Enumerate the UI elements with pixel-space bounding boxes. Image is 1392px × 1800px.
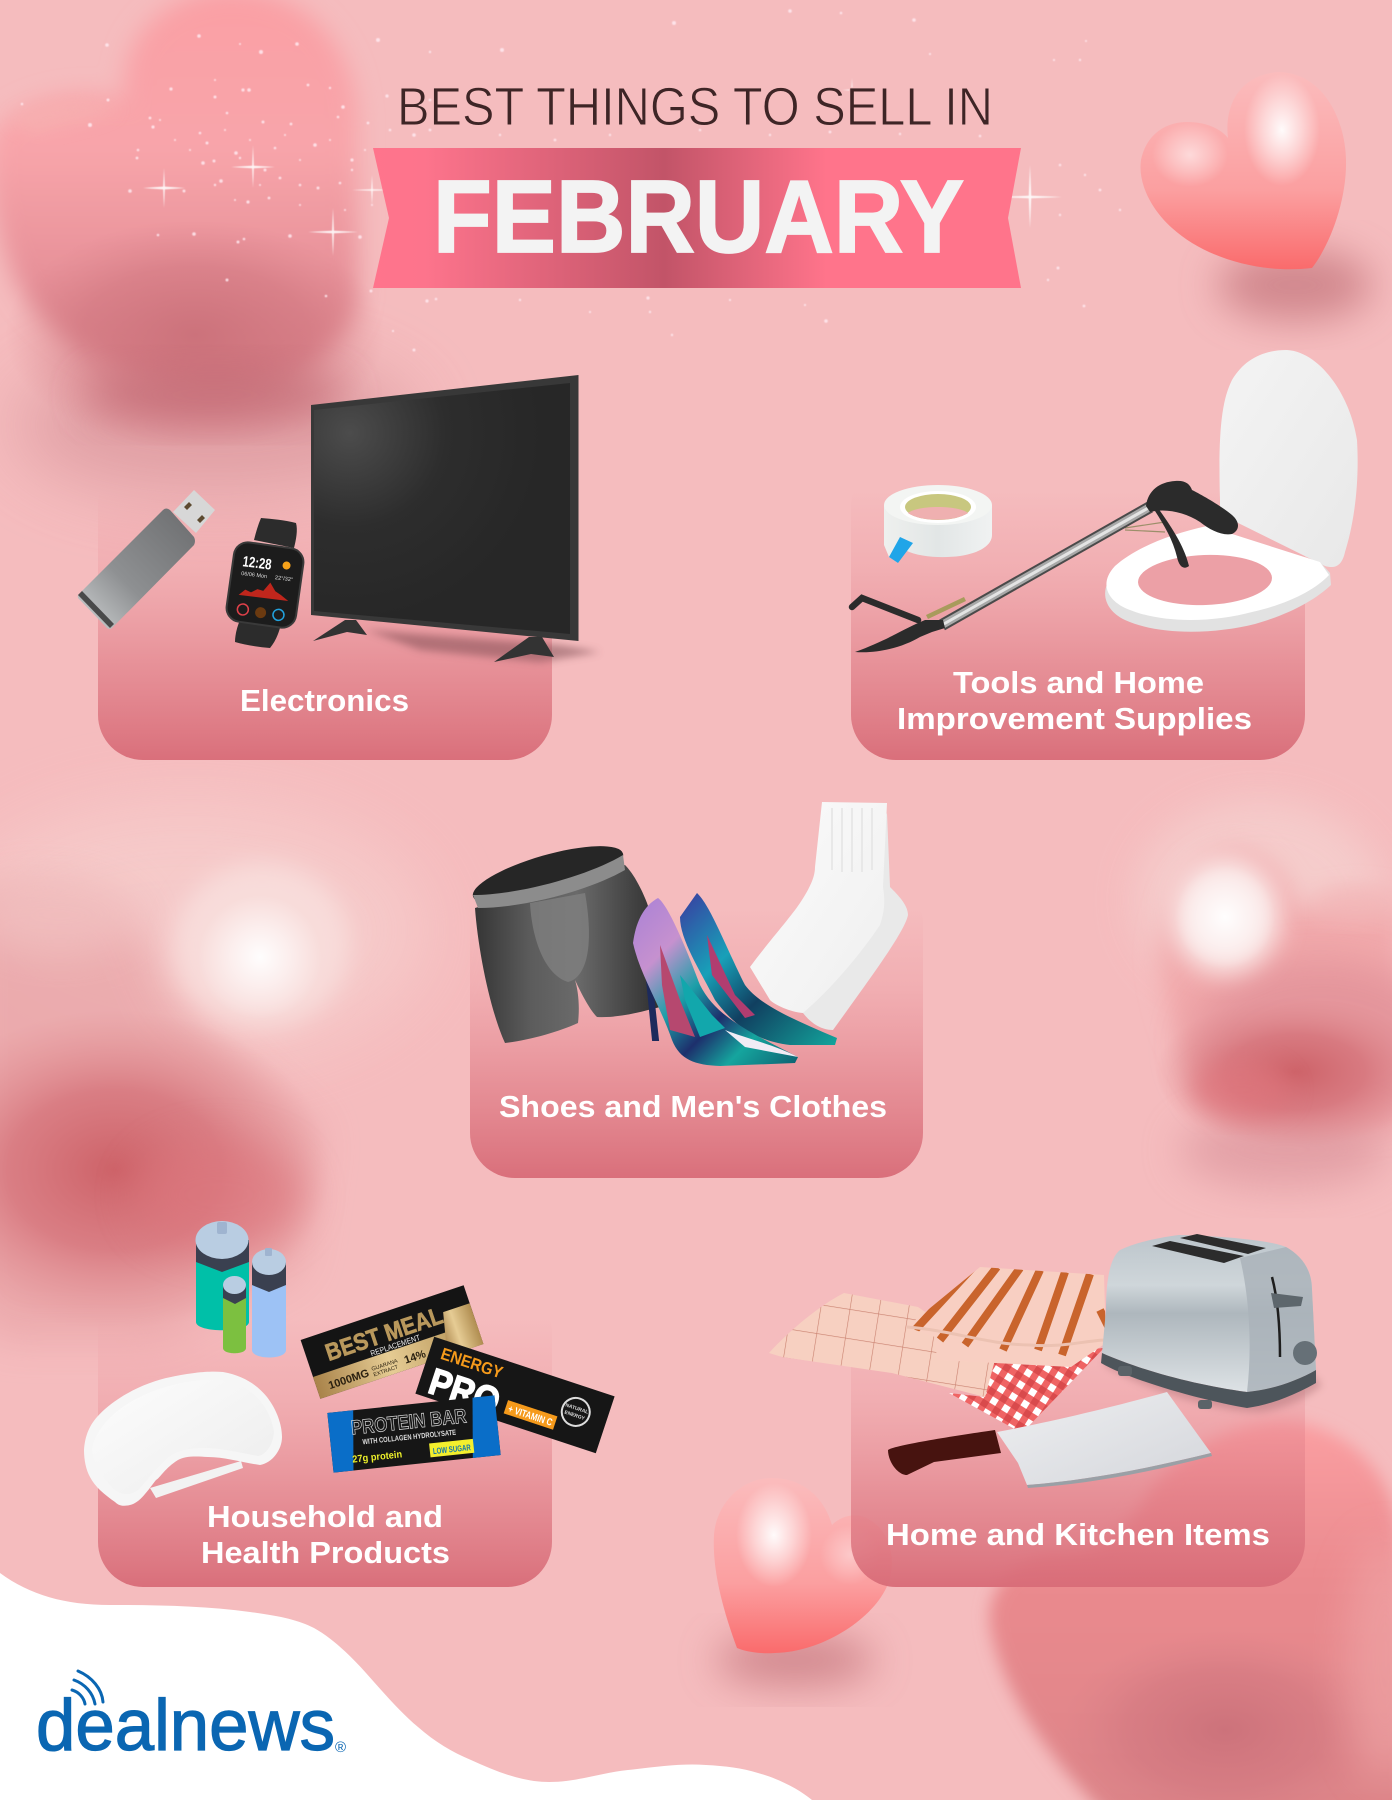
blurred heart: top left [0,0,415,495]
icon: best meal bar: 1000MG [327,1367,371,1392]
sparkles [21,9,1121,351]
banner [373,148,1021,288]
icon: energy pro bar: ENERGY [438,1344,506,1383]
icon: energy pro bar: ENERGY [564,1410,586,1422]
panel: tools [851,350,1358,760]
icon: smartwatch: 22°/32° [275,575,293,583]
icon: boxer briefs [468,834,660,1043]
icon: protein bar: PROTEIN BAR [350,1405,468,1439]
icon: batteries [196,1221,286,1358]
crisp heart: top right [1140,72,1373,321]
label: shoes and clothes: Shoes and Men's Clothes [499,1089,887,1124]
icon: tv shadow [366,630,600,662]
icon: toilet seat [1105,350,1358,632]
icon: high heel shoes [633,893,837,1066]
title: BEST THINGS TO SELL IN [397,77,993,137]
icon: best meal bar: REPLACEMENT [369,1333,421,1358]
registered mark: ® [335,1739,346,1756]
icon: checked cloth [769,1293,995,1397]
icon: smartwatch [225,518,305,648]
icon: best meal bar: 14% [403,1348,428,1367]
icon: protein bar [327,1395,501,1473]
icon: television [311,375,578,662]
blurred heart: middle left [0,800,430,1340]
icon: gingham cloth [949,1348,1104,1433]
icon: smartwatch: 06/06 Mon [241,571,267,580]
label: tools: Tools and Home [953,665,1204,700]
icon: signal waves [72,1671,103,1704]
wordmark: dealnews [36,1686,335,1766]
panel: electronics [78,375,600,760]
icon: socks [750,802,908,1030]
icon: best meal bar: GUARANA [371,1358,399,1373]
heading: February: FEBRUARY [433,159,964,274]
blurred heart: bottom right [990,1421,1392,1800]
icon: smartwatch: 12:28 [242,553,273,574]
icon: tape roll [884,485,992,563]
icon: protein bar: 27g protein [352,1449,403,1466]
icon: protein bar: LOW SUGAR [432,1442,471,1456]
icon: energy pro bar: NATURAL [564,1403,589,1416]
icon: energy pro bar [414,1337,615,1456]
icon: toaster [1101,1234,1322,1412]
panel: shoes and clothes [468,802,923,1178]
icon: energy pro bar: PRO [424,1361,505,1422]
crisp heart: bottom centre [714,1478,892,1686]
icon: best meal bar: BEST MEAL [322,1302,446,1367]
icon: cleaver [888,1392,1212,1488]
logo: dealnews [36,1671,346,1766]
panel: household and health [84,1221,615,1587]
icon: protein bar: WITH COLLAGEN HYDROLYSATE [362,1428,457,1446]
icon: reacher grabber [852,481,1238,652]
label: home and kitchen: Home and Kitchen Items [886,1517,1270,1552]
icon: best meal bar [301,1285,483,1399]
label: electronics: Electronics [240,683,409,718]
icon: striped cloth [907,1265,1115,1367]
icon: energy pro bar: + VITAMIN C [507,1404,554,1429]
blurred heart: middle right [1135,800,1392,1188]
panel: home and kitchen [769,1234,1322,1587]
label: tools: Improvement Supplies [897,701,1252,736]
star flares [143,78,1062,256]
label: household and health: Household and [207,1499,443,1534]
icon: best meal bar: EXTRACT [373,1364,400,1378]
white wave footer [0,1573,812,1800]
icon: usb drive [78,490,215,629]
icon: sleep mask [84,1372,282,1506]
label: household and health: Health Products [201,1535,450,1570]
